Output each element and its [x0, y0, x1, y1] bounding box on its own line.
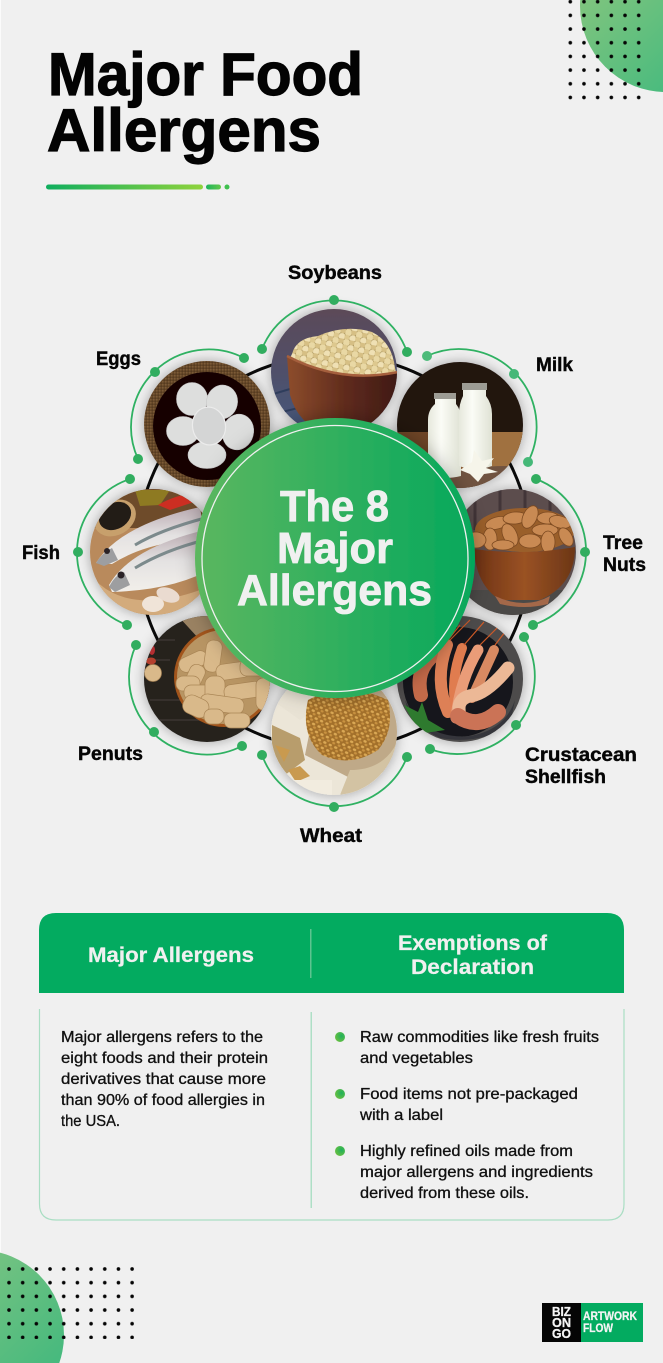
list: exemptions: derived from these oils. [360, 1185, 529, 1202]
label: wheat: Wheat [300, 826, 363, 847]
table outline [40, 1009, 624, 1220]
decoration: bottom-left green circle with dots [0, 1250, 134, 1363]
decoration: top-right green circle with dots [568, 0, 663, 100]
label: fish: Fish [22, 543, 60, 564]
photo: peanuts [143, 612, 274, 743]
label: peanuts: Penuts [78, 744, 143, 765]
body divider [310, 1012, 312, 1208]
photo: wheat [270, 668, 398, 796]
label: crustacean shellfish [525, 745, 637, 788]
list: exemptions: Raw commodities like fresh fruits [360, 1029, 599, 1046]
text: major allergens definition: eight foods and their protein [61, 1050, 268, 1067]
allergen wheel connecting ring [137, 355, 531, 749]
list: exemptions: Highly refined oils made from [360, 1143, 573, 1160]
label: tree nuts [603, 533, 646, 576]
label: eggs: Eggs [96, 349, 141, 370]
photo: tree nuts [449, 488, 577, 620]
logo: bizongo artwork flow [542, 1303, 643, 1342]
table header [39, 913, 624, 993]
list: exemptions: Food items not pre-packaged [360, 1086, 578, 1103]
heading: exemptions of declaration: Exemptions of [398, 931, 548, 955]
heading: exemptions of declaration [398, 931, 548, 979]
center circle: The 8 [280, 482, 389, 531]
label: milk: Milk [536, 355, 573, 376]
green arcs with dots around photos [73, 295, 590, 812]
label: crustacean shellfish: Crustacean [525, 745, 637, 766]
label: tree nuts: Tree [603, 533, 643, 554]
label: tree nuts: Nuts [603, 555, 646, 576]
photo: crustacean shellfish [396, 615, 524, 743]
logo: bizongo artwork flow: GO [552, 1327, 571, 1341]
text: major allergens definition: than 90% of food allergies in [61, 1092, 265, 1109]
title: Major Food [48, 41, 363, 108]
heading: major allergens: Major Allergens [88, 943, 254, 967]
logo: bizongo artwork flow: ARTWORK [583, 1311, 638, 1323]
title: Allergens [47, 97, 321, 164]
logo: bizongo artwork flow: ON [552, 1316, 571, 1330]
title [47, 41, 363, 164]
logo: bizongo artwork flow: FLOW [583, 1323, 613, 1335]
center circle [195, 418, 475, 698]
list: exemptions [335, 1029, 599, 1202]
photo: soybeans [270, 308, 398, 436]
photo: milk [396, 361, 524, 489]
label: soybeans: Soybeans [288, 263, 382, 284]
center circle: Major [277, 524, 393, 573]
logo: bizongo artwork flow: BIZ [552, 1305, 571, 1319]
header divider [310, 929, 312, 978]
list: exemptions: and vegetables [360, 1050, 473, 1067]
title underline accent [46, 184, 230, 190]
center circle: Allergens [237, 566, 432, 615]
heading: exemptions of declaration: Declaration [411, 955, 534, 979]
photo: fish [87, 488, 217, 616]
text: major allergens definition: derivatives that cause more [61, 1071, 266, 1088]
panel: allergens table [39, 913, 624, 1220]
list: exemptions: major allergens and ingredients [360, 1164, 593, 1181]
text: major allergens definition [61, 1029, 268, 1130]
photo: eggs [143, 360, 271, 488]
text: major allergens definition: the USA. [61, 1113, 120, 1130]
label: crustacean shellfish: Shellfish [525, 767, 606, 788]
text: major allergens definition: Major allergens refers to the [61, 1029, 263, 1046]
list: exemptions: with a label [359, 1107, 443, 1124]
